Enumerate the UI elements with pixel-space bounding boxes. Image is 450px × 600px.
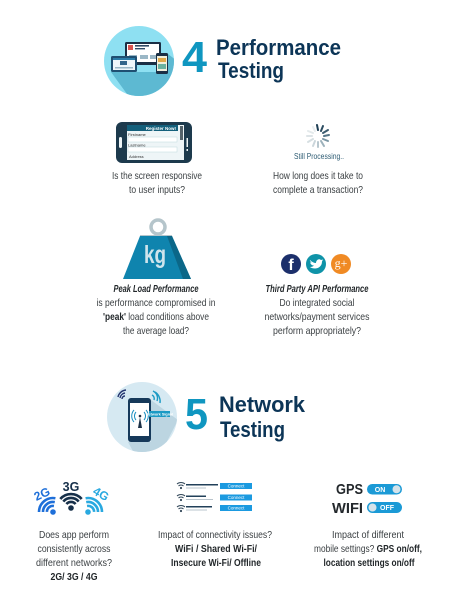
text: connectivity question: Insecure Wi-Fi/ Offline <box>171 557 261 569</box>
heading: Performance Testing: Performance <box>216 35 341 60</box>
panel: screen responsiveness <box>112 122 202 196</box>
icon: GPS and WIFI toggles: GPS <box>336 481 363 498</box>
text: connectivity question: Impact of connectivity issues? <box>158 529 272 541</box>
text: peak load question: is performance compromised in <box>96 297 216 309</box>
icon: social buttons: f <box>288 257 294 274</box>
text: networks question: Does app perform <box>39 529 109 541</box>
icon: phone with form <box>116 122 192 163</box>
text: connectivity question <box>158 529 272 569</box>
text: settings question: Impact of different <box>332 529 404 541</box>
icon: social buttons <box>281 254 351 274</box>
icon: GPS and WIFI toggles: WIFI <box>332 500 363 517</box>
panel: mobile settings <box>314 481 422 569</box>
section 5 header <box>107 382 305 455</box>
icon: GPS and WIFI toggles: OFF <box>380 505 395 512</box>
text: screen question: to user inputs? <box>129 184 185 196</box>
icon: loading spinner <box>307 125 329 147</box>
panel: transaction time <box>273 125 363 196</box>
panel: peak load <box>96 220 216 337</box>
number 4: 4 <box>182 33 208 82</box>
text: settings question: mobile settings? GPS on/off, <box>314 543 422 555</box>
icon: kg weight: kg <box>144 241 166 269</box>
text: peak load question: 'peak' load conditions above <box>103 311 209 323</box>
icon: connection list: Connect <box>228 506 245 510</box>
text: networks question: consistently across <box>38 543 110 555</box>
icon: connection list <box>177 482 252 512</box>
icon: connection list: Connect <box>228 484 245 488</box>
text: networks question <box>36 529 112 583</box>
text: peak load question <box>96 283 216 337</box>
text: API question: Third Party API Performance <box>266 283 369 295</box>
text: API question: Do integrated social <box>280 297 354 309</box>
icon: network signals: 3G <box>63 480 79 494</box>
icon: network signals <box>32 480 111 516</box>
heading: Network Testing: Network <box>219 392 305 417</box>
text: API question <box>264 283 370 337</box>
text: settings question: location settings on/off <box>324 557 415 569</box>
text: transaction question: complete a transaction? <box>273 184 363 196</box>
icon: phone with network signal <box>107 382 178 455</box>
icon: phone with network signal: Network Signal <box>146 412 173 416</box>
icon: phone with form: Register Now! <box>146 126 176 131</box>
icon: GPS and WIFI toggles <box>332 481 402 517</box>
icon: network signals: 4G <box>91 484 111 504</box>
text: networks question: different networks? <box>36 557 112 569</box>
icon: GPS and WIFI toggles: ON <box>375 487 385 494</box>
icon: phone with form: Lastname <box>128 142 146 148</box>
text: screen question: Is the screen responsive <box>112 170 202 182</box>
label: still processing: Still Processing.. <box>294 152 344 161</box>
section 4 header <box>104 26 340 96</box>
text: API question: networks/payment services <box>264 311 370 323</box>
text: peak load question: the average load? <box>123 325 189 337</box>
text: API question: perform appropriately? <box>273 325 361 337</box>
panel: 2G 3G 4G networks <box>32 480 112 583</box>
text: connectivity question: WiFi / Shared Wi-Fi/ <box>175 543 257 555</box>
icon: phone with form: Address <box>129 154 144 159</box>
panel: third party API <box>264 254 370 337</box>
text: screen question <box>112 170 202 196</box>
text: transaction question <box>273 170 363 196</box>
icon: social buttons: g+ <box>335 256 348 270</box>
text: settings question <box>314 529 422 569</box>
heading: Network Testing: Testing <box>220 417 285 442</box>
text: peak load question: Peak Load Performance <box>114 283 199 295</box>
number 5: 5 <box>185 390 208 439</box>
text: networks question: 2G/ 3G / 4G <box>50 571 98 583</box>
panel: connectivity issues <box>158 482 272 569</box>
heading: Performance Testing: Testing <box>218 58 284 83</box>
icon: connection list: Connect <box>228 495 245 500</box>
icon: responsive devices <box>104 26 174 96</box>
heading: Network Testing <box>219 392 305 442</box>
text: transaction question: How long does it take to <box>273 170 363 182</box>
icon: network signals: 2G <box>32 484 52 504</box>
icon: phone with form: Firstname <box>128 132 147 137</box>
heading: Performance Testing <box>216 35 341 83</box>
